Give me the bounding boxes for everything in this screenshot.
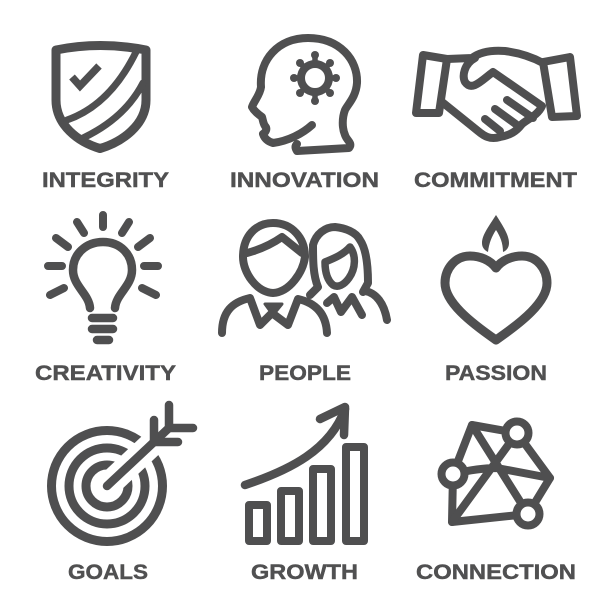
- label: goals: GOALS: [68, 561, 148, 584]
- icon: network: [442, 422, 550, 526]
- label: people: PEOPLE: [259, 362, 351, 385]
- icon: shield: [56, 46, 146, 148]
- panel: commitment: [414, 51, 577, 192]
- panel: passion: [445, 215, 547, 385]
- label: passion: PASSION: [445, 362, 547, 385]
- panel: people: [222, 223, 387, 385]
- icon: flame: [482, 215, 509, 252]
- panel: creativity: [35, 215, 176, 385]
- panel: growth: [245, 407, 364, 584]
- label: integrity: INTEGRITY: [42, 169, 169, 192]
- panel: connection: [416, 422, 576, 584]
- icon: man and woman: [222, 223, 387, 333]
- label: commitment: COMMITMENT: [414, 169, 577, 192]
- icon: target with arrow: [52, 405, 193, 542]
- icon: rising bars and arrow: [245, 407, 364, 541]
- icon: light bulb: [48, 215, 158, 340]
- panel: goals: [52, 405, 193, 584]
- panel: integrity: [42, 46, 169, 192]
- icon: head with gear: [252, 38, 357, 151]
- panel: innovation: [230, 38, 379, 192]
- label: creativity: CREATIVITY: [35, 362, 176, 385]
- label: growth: GROWTH: [251, 561, 358, 584]
- icon: handshake: [416, 51, 577, 138]
- label: connection: CONNECTION: [416, 561, 576, 584]
- label: innovation: INNOVATION: [230, 169, 379, 192]
- icon: heart: [445, 256, 547, 340]
